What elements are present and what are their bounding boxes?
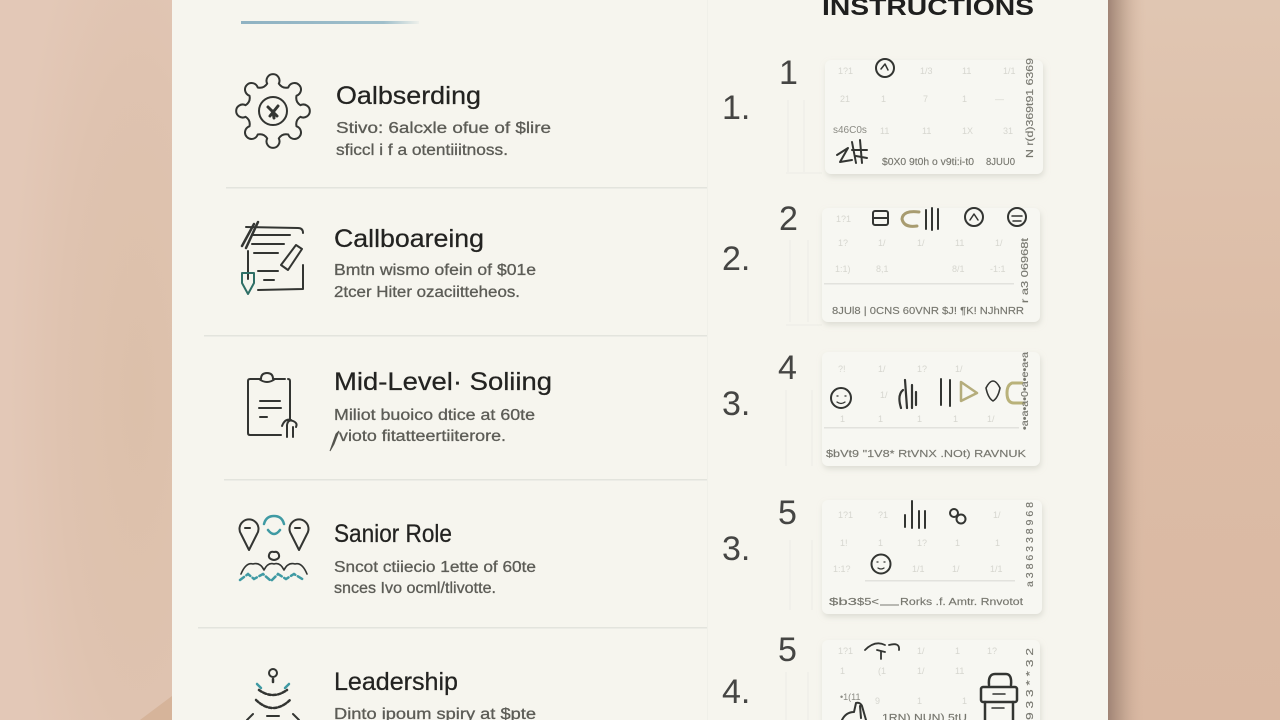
- column divider: [707, 0, 708, 720]
- description: Stivo: 6alcxle ofue of $lire: [336, 120, 551, 137]
- calendar card: 1/: [987, 414, 995, 424]
- calendar card: —: [995, 94, 1004, 104]
- calendar card: 1: [917, 414, 922, 424]
- calendar card: 1/: [880, 390, 888, 400]
- stage 4: senior role: [240, 516, 536, 597]
- ghost grid: [786, 672, 808, 720]
- description: vioto fitatteertiiterore.: [339, 428, 506, 445]
- calendar card: 1: [962, 696, 967, 706]
- calendar card: (1: [878, 666, 886, 676]
- calendar card: •a•a•a•0•a•e•a•a: [1019, 352, 1031, 430]
- calendar card: 1/: [993, 510, 1001, 520]
- calendar card: 8/1: [952, 264, 965, 274]
- calendar card: 1/: [917, 238, 925, 248]
- step 4: [722, 494, 1042, 614]
- calendar card: 1?1: [838, 66, 853, 76]
- calendar card: 1/: [952, 564, 960, 574]
- step 2: [722, 200, 1040, 325]
- calendar card: 1: [878, 538, 883, 548]
- stage 1: onboarding: [236, 74, 551, 159]
- calendar card: 1?1: [836, 214, 851, 224]
- calendar card: 1: [840, 414, 845, 424]
- description: [334, 559, 536, 597]
- calendar card: ?!: [838, 364, 846, 374]
- description: snces Ivo ocml/tlivotte.: [334, 580, 496, 597]
- calendar card: r a3 06968t: [1019, 238, 1031, 303]
- calendar card: 8JUU0: [986, 156, 1015, 168]
- calendar card: 31: [1003, 126, 1013, 136]
- ghost grid: [786, 100, 822, 173]
- calendar card: 1/3: [920, 66, 933, 76]
- description: Sncot ctiiecio 1ette of 60te: [334, 559, 536, 576]
- calendar card: 8,1: [876, 264, 889, 274]
- calendar card: 1: [878, 414, 883, 424]
- calendar card: [825, 58, 1043, 174]
- icon: printer: [981, 674, 1017, 720]
- pen mark: [330, 431, 339, 451]
- calendar card: 11: [922, 126, 931, 136]
- calendar card: 1/: [995, 238, 1003, 248]
- icon: leadership network: [247, 669, 299, 720]
- calendar card: 1: [917, 696, 922, 706]
- panel: career stages: [198, 74, 707, 720]
- calendar card: 1: [881, 94, 886, 104]
- calendar card: 1/: [955, 364, 963, 374]
- calendar card: s46C0s: [833, 125, 867, 136]
- calendar card: 11: [955, 666, 964, 676]
- icon: figure: [842, 703, 866, 720]
- icon: face: [872, 554, 890, 574]
- icon: clipboard: [248, 373, 297, 437]
- calendar card: 1/1: [1003, 66, 1016, 76]
- heading: Sanior Role: [334, 520, 452, 548]
- calendar card: 1?: [987, 646, 997, 656]
- calendar card: 1:1): [835, 264, 851, 274]
- accent rule: [241, 21, 419, 24]
- calendar card: 1: [995, 538, 1000, 548]
- calendar card: 1!: [840, 538, 848, 548]
- calendar card: ?1: [878, 510, 888, 520]
- calendar card: 1/: [917, 646, 925, 656]
- calendar card: 1: [962, 94, 967, 104]
- icons: row: [873, 208, 1026, 230]
- icon: team and pins: [240, 516, 308, 581]
- calendar card: 1X: [962, 126, 973, 136]
- calendar card: 11: [955, 238, 964, 248]
- step label: 1.: [722, 89, 750, 127]
- calendar card: 9 3 3 * * 3 2: [1024, 648, 1036, 720]
- icons: row: [831, 379, 1024, 408]
- stage 3: mid-level: [248, 368, 552, 451]
- calendar card: $5<: [857, 596, 879, 608]
- calendar card: 1/: [878, 364, 886, 374]
- calendar card: [822, 640, 1040, 720]
- ghost grid: [786, 240, 822, 325]
- icon: document and pen: [242, 222, 303, 294]
- description: sficcl i f a otentiiitnoss.: [336, 142, 508, 159]
- step label: 3.: [722, 385, 750, 423]
- description: [334, 407, 535, 445]
- step label: 4.: [722, 673, 750, 711]
- calendar card: •1(11: [840, 692, 860, 702]
- calendar card: 21: [840, 94, 850, 104]
- calendar card: [822, 500, 1042, 614]
- calendar card: 11: [962, 66, 971, 76]
- step label: 2.: [722, 240, 750, 278]
- icon: chain: [950, 509, 966, 524]
- calendar card: a 3 8 6 3 3 8 9 6 8: [1024, 502, 1036, 587]
- heading: Leadership: [334, 668, 458, 696]
- calendar card: 1/1: [990, 564, 1003, 574]
- calendar card: $bVt9 "1V8* RtVNX .NOt) RAVNUK: [826, 448, 1026, 460]
- ghost grid: [786, 390, 812, 466]
- panel: instruction steps: [722, 54, 1043, 720]
- main panel: [172, 0, 1108, 720]
- heading: Oalbserding: [336, 82, 481, 110]
- heading: Callboareing: [334, 225, 484, 253]
- step 3: [722, 349, 1040, 466]
- stage 2: collaboration: [242, 222, 536, 301]
- calendar card: -1:1: [990, 264, 1006, 274]
- ghost grid: [790, 540, 812, 610]
- stage 5: leadership: [247, 668, 536, 720]
- calendar card: 1?: [917, 364, 927, 374]
- step label: 3.: [722, 530, 750, 568]
- calendar card: 1: [955, 538, 960, 548]
- calendar card: 1?1: [838, 646, 853, 656]
- calendar card: 7: [923, 94, 928, 104]
- calendar card: 1/: [878, 238, 886, 248]
- description: Miliot buoico dtice at 60te: [334, 407, 535, 424]
- description: [334, 262, 536, 301]
- heading: Mid-Level· Soliing: [334, 368, 552, 396]
- calendar card: N r(d)369t91 6369: [1024, 58, 1036, 158]
- calendar card: 1: [840, 666, 845, 676]
- calendar card: 1:1?: [833, 564, 851, 574]
- icon: bars: [905, 501, 925, 528]
- calendar card: 1/1: [912, 564, 925, 574]
- icon: figure: [837, 140, 867, 163]
- calendar card: 1?: [917, 538, 927, 548]
- step number: 4: [778, 349, 797, 387]
- calendar card: $b3: [829, 596, 857, 608]
- step number: 5: [778, 494, 797, 532]
- calendar card: 1?: [838, 238, 848, 248]
- step 5: [722, 631, 1040, 720]
- calendar card: $0X0 9t0h o v9ti:i-t0: [882, 156, 974, 168]
- calendar card: 8JUl8 | 0CNS 60VNR $J! ¶K! NJhNRR: [832, 305, 1024, 317]
- calendar card: 1?1: [838, 510, 853, 520]
- calendar card: 1/: [917, 666, 925, 676]
- calendar card: [822, 352, 1040, 466]
- calendar card: Rorks .f. Amtr. Rnvotot: [900, 596, 1023, 608]
- description: [336, 120, 551, 159]
- icon: arch: [865, 643, 899, 659]
- icon: gear: [236, 74, 310, 148]
- calendar card: [822, 208, 1040, 322]
- step number: 5: [778, 631, 797, 669]
- calendar card: 1: [955, 646, 960, 656]
- icon: clock: [876, 59, 894, 77]
- description: Bmtn wismo ofein of $01e: [334, 262, 536, 279]
- calendar card: 9: [875, 696, 880, 706]
- step number: 1: [779, 54, 798, 92]
- step 1: [722, 54, 1043, 174]
- description: 2tcer Hiter ozaciitteheos.: [334, 284, 520, 301]
- calendar card: 11: [880, 126, 889, 136]
- calendar card: 1: [953, 414, 958, 424]
- step number: 2: [779, 200, 798, 238]
